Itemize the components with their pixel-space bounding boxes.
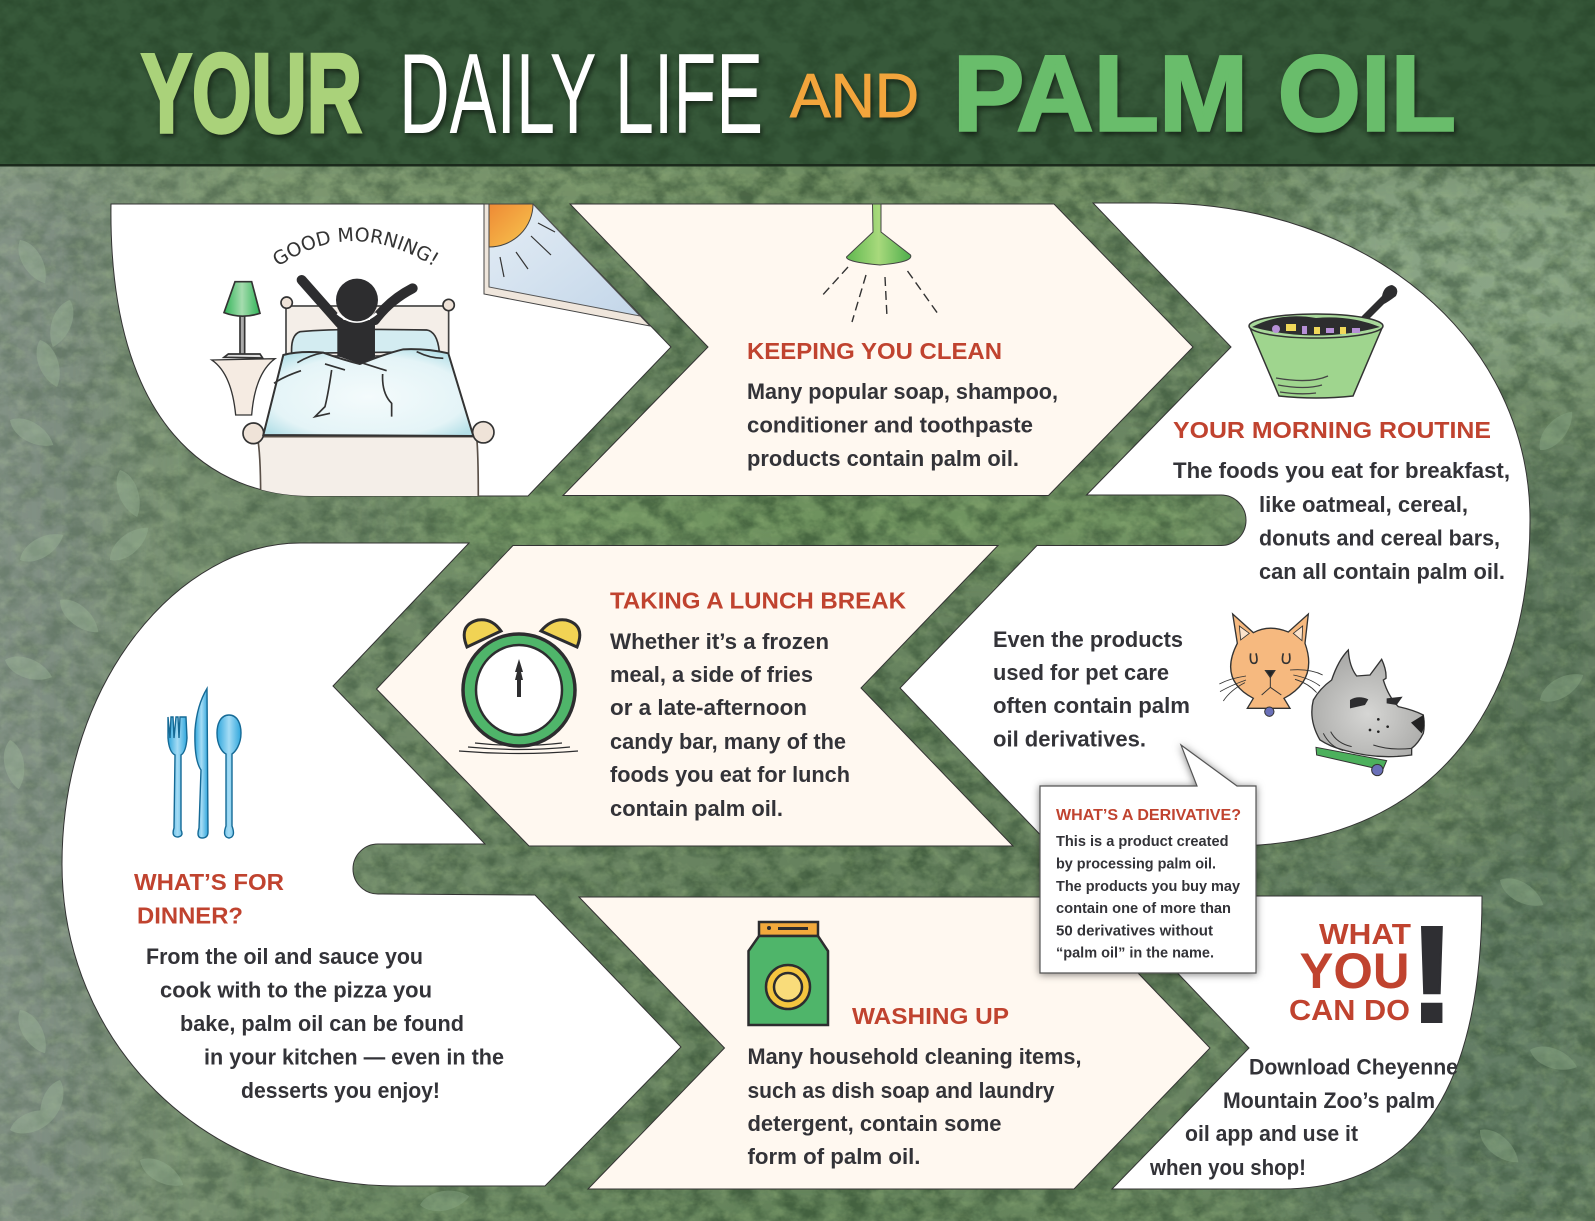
- text block: desserts you enjoy!: [241, 1078, 440, 1103]
- text block: Whether it’s a frozen: [610, 629, 829, 654]
- callout text: contain one of more than: [1056, 901, 1231, 917]
- heading: what you can do: WHAT: [1319, 919, 1411, 951]
- icon: cutlery: [168, 688, 241, 838]
- text block: [146, 944, 504, 1103]
- heading: TAKING A LUNCH BREAK: [610, 588, 906, 614]
- text block: [1173, 458, 1510, 584]
- callout text: The products you buy may: [1056, 879, 1240, 895]
- icon: bed with person: [243, 279, 494, 498]
- speech: good morning: GOOD MORNING!: [274, 227, 438, 265]
- text block: oil app and use it: [1185, 1121, 1359, 1146]
- heading: what you can do: [1289, 898, 1455, 1052]
- title: [141, 31, 1456, 158]
- title: DAILY LIFE: [399, 31, 763, 158]
- heading: what you can do: CAN DO: [1289, 995, 1410, 1027]
- title: AND: [790, 62, 919, 131]
- icon: cereal bowl: [1249, 285, 1397, 398]
- header band: [0, 0, 1595, 166]
- icon: window with sun: [484, 204, 650, 326]
- callout heading: WHAT’S A DERIVATIVE?: [1056, 807, 1241, 824]
- text block: Download Cheyenne: [1249, 1054, 1458, 1080]
- text block: [747, 379, 1058, 471]
- heading: [134, 869, 284, 928]
- text block: pet care: oil derivatives.: [993, 726, 1146, 752]
- heading: WASHING UP: [852, 1003, 1009, 1029]
- icon: lamp and nightstand: [212, 282, 275, 415]
- callout: what's a derivative: [1040, 745, 1256, 973]
- panel: morning routine and pet care: [900, 203, 1530, 846]
- text block: cook with to the pizza you: [160, 978, 432, 1002]
- callout text: “palm oil” in the name.: [1056, 946, 1214, 962]
- text block: conditioner and toothpaste: [747, 412, 1033, 438]
- text block: can all contain palm oil.: [1259, 559, 1505, 584]
- text block: donuts and cereal bars,: [1259, 526, 1500, 550]
- text block: detergent, contain some: [748, 1111, 1002, 1136]
- panel: good morning: [110, 204, 672, 496]
- text block: Many popular soap, shampoo,: [747, 379, 1058, 404]
- text block: such as dish soap and laundry: [748, 1078, 1055, 1103]
- callout text: by processing palm oil.: [1056, 856, 1216, 872]
- panel: washing up: [579, 897, 1210, 1189]
- icon: cat: [1219, 614, 1323, 716]
- text block: pet care: Even the products: [993, 627, 1183, 652]
- callout text: [1056, 834, 1240, 962]
- heading: what you can do: !: [1409, 898, 1455, 1052]
- text block: Mountain Zoo’s palm: [1223, 1088, 1435, 1113]
- callout text: 50 derivatives without: [1056, 924, 1213, 940]
- text block: candy bar, many of the: [610, 729, 846, 754]
- text block: pet care: often contain palm: [993, 693, 1190, 718]
- icon: shower head: [820, 204, 940, 322]
- icon: alarm clock: [459, 620, 580, 754]
- text block: or a late-afternoon: [610, 695, 807, 720]
- text block: meal, a side of fries: [610, 662, 813, 687]
- text block: pet care: used for pet care: [993, 660, 1169, 685]
- text block: From the oil and sauce you: [146, 944, 423, 969]
- text block: bake, palm oil can be found: [180, 1011, 464, 1036]
- title: PALM OIL: [953, 32, 1456, 154]
- text block: The foods you eat for breakfast,: [1173, 458, 1510, 483]
- callout text: This is a product created: [1056, 834, 1228, 850]
- heading: DINNER?: [137, 902, 243, 928]
- text block: foods you eat for lunch: [610, 762, 850, 787]
- text block: when you shop!: [1149, 1155, 1306, 1180]
- icon: dog: [1312, 650, 1425, 776]
- text block: [1149, 1054, 1458, 1180]
- panel: taking a lunch break: [376, 546, 1013, 846]
- text block: form of palm oil.: [748, 1144, 920, 1169]
- heading: WHAT’S FOR: [134, 869, 284, 895]
- text block: like oatmeal, cereal,: [1259, 492, 1468, 517]
- panel: keeping you clean: [563, 204, 1193, 496]
- text block: in your kitchen — even in the: [204, 1044, 504, 1070]
- heading: YOUR MORNING ROUTINE: [1173, 417, 1491, 443]
- text block: Many household cleaning items,: [748, 1044, 1082, 1069]
- panel: what's for dinner: [62, 543, 681, 1186]
- text block: [610, 629, 850, 821]
- heading: what you can do: YOU: [1300, 943, 1410, 999]
- icon: washing machine: [748, 922, 828, 1025]
- heading: KEEPING YOU CLEAN: [747, 338, 1002, 364]
- panel: what you can do: [1104, 896, 1482, 1189]
- text block: pet care: [993, 627, 1190, 752]
- text block: [748, 1044, 1082, 1169]
- text block: products contain palm oil.: [747, 446, 1019, 471]
- text block: contain palm oil.: [610, 796, 783, 821]
- title: YOUR: [141, 31, 362, 156]
